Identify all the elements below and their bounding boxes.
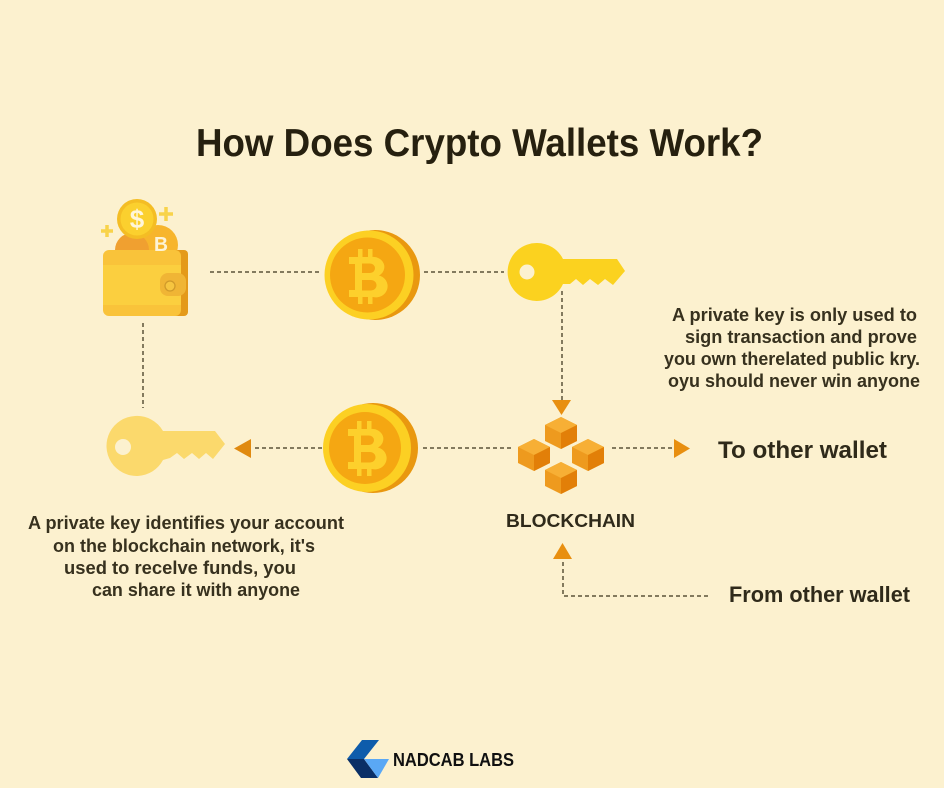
paragraph: public key: can share it with anyone (92, 579, 300, 600)
icon: yellow key (508, 243, 625, 301)
paragraph: private key: oyu should never win anyone (668, 370, 920, 391)
connector: coin to blockchain (423, 447, 514, 449)
label: blockchain: BLOCKCHAIN (506, 510, 635, 531)
arrow: up into blockchain (553, 543, 572, 559)
icon: bitcoin coin top (324, 230, 420, 320)
icon: wallet (101, 199, 188, 316)
connector: blockchain to other wallet (612, 447, 672, 449)
arrow: to pale key (234, 439, 251, 458)
icon: wallet: B (154, 234, 168, 256)
connector: coin to key (424, 271, 504, 273)
paragraph: public key: used to recelve funds, you (64, 557, 296, 578)
icon: pale key (106, 416, 225, 476)
logo: Nadcab Labs: NADCAB LABS (393, 749, 514, 770)
icon: bitcoin coin bottom (323, 403, 418, 493)
icon: wallet: $ (130, 204, 145, 234)
paragraph: private key: A private key is only used to (672, 304, 917, 325)
connector: coin to pale key (255, 447, 322, 449)
label: from other wallet: From other wallet (729, 582, 911, 607)
arrow: down into blockchain (552, 400, 571, 415)
paragraph: public key: on the blockchain network, it's (53, 535, 315, 556)
paragraph: private key: sign transaction and prove (685, 326, 917, 347)
connector: wallet to lower key (142, 323, 144, 408)
title: How Does Crypto Wallets Work? (196, 122, 763, 165)
logo: Nadcab Labs (347, 740, 514, 778)
label: to other wallet: To other wallet (718, 437, 887, 464)
arrow: to other wallet (674, 439, 690, 458)
paragraph: public key: A private key identifies your account (28, 512, 344, 533)
paragraph: private key: you own therelated public kry. (664, 348, 920, 369)
connector: key to blockchain (561, 291, 563, 401)
paragraph: public key (28, 512, 344, 600)
connector: from other wallet (563, 562, 710, 596)
connector: wallet to coin (210, 271, 319, 273)
icon: blockchain cubes (518, 417, 604, 494)
paragraph: private key (664, 304, 920, 391)
